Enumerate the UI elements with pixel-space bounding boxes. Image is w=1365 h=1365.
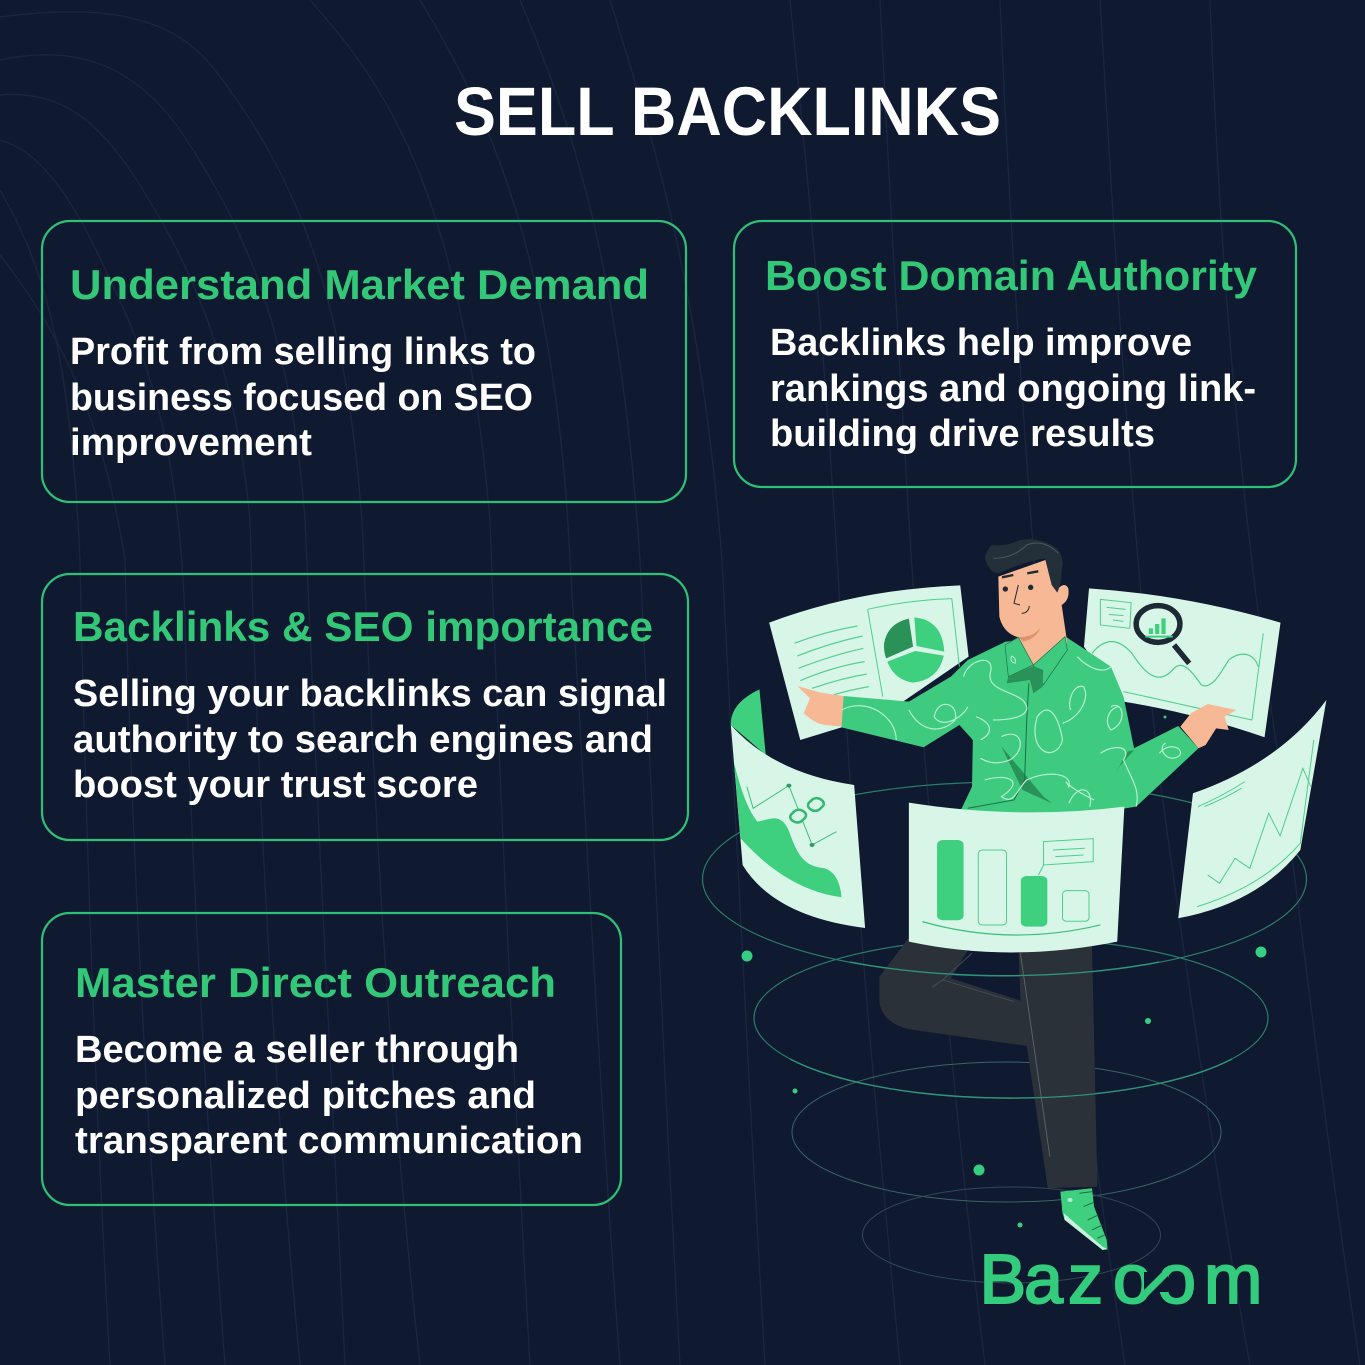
shirt [842,636,1198,813]
panel: magnifier page [1084,588,1281,737]
shirt squiggles [842,657,1181,807]
face details [1003,586,1008,592]
text block: market demand body: Profit from selling links to [70,331,536,373]
legs [879,937,1108,1250]
skin: face and neck [998,558,1069,667]
heading: boost domain authority: Boost Domain Authority [765,252,1258,299]
text block: seo importance body [73,673,667,806]
text block: seo importance body: boost your trust score [73,764,478,806]
heading: understand market demand: Understand Market Demand [70,261,649,308]
illustration: man with floating data panels [702,539,1326,1318]
text block: market demand body: business focused on SEO [70,377,533,419]
front arcs of rings over the legs [790,962,1232,1098]
panel: boost domain authority [734,221,1296,487]
heading: master direct outreach: Master Direct Outreach [75,959,556,1006]
text block: market demand body: improvement [70,422,312,464]
man [797,636,1236,813]
text block: domain authority body: rankings and ongoing link- [770,368,1256,410]
panel: master direct outreach [42,913,621,1205]
panel: line chart page [1178,700,1326,918]
orbit rings [702,782,1306,1283]
green dots [742,716,1266,1228]
panel: pie chart page [769,585,969,740]
panel: bar chart page [909,803,1124,952]
title: SELL BACKLINKS [454,73,1001,150]
left hand [797,686,844,727]
panel: link chart page [731,689,865,928]
text block: seo importance body: Selling your backlinks can signal [73,673,667,715]
text block: domain authority body: building drive results [770,413,1155,455]
heading: backlinks and seo importance: Backlinks & SEO importance [73,603,653,650]
text block: direct outreach body: transparent communication [75,1120,583,1162]
panel: understand market demand [42,221,686,502]
text block: direct outreach body: Become a seller through [75,1029,519,1071]
shoe [1060,1188,1108,1250]
text block: direct outreach body [75,1029,583,1162]
icon: chain link [788,796,826,824]
text block: domain authority body: Backlinks help improve [770,322,1192,364]
text block: market demand body [70,331,536,464]
panel: backlinks and seo importance [42,574,688,840]
collar [1005,637,1033,677]
man head [985,539,1069,693]
icon: magnifying glass [1136,606,1189,663]
text block: seo importance body: authority to search engines and [73,719,653,761]
text block: direct outreach body: personalized pitches and [75,1075,536,1117]
logo: bazoom: Bazoom [980,1240,1262,1318]
pie chart [884,617,944,683]
right hand [1180,704,1236,748]
hair [985,539,1063,593]
text block: domain authority body [770,322,1256,455]
